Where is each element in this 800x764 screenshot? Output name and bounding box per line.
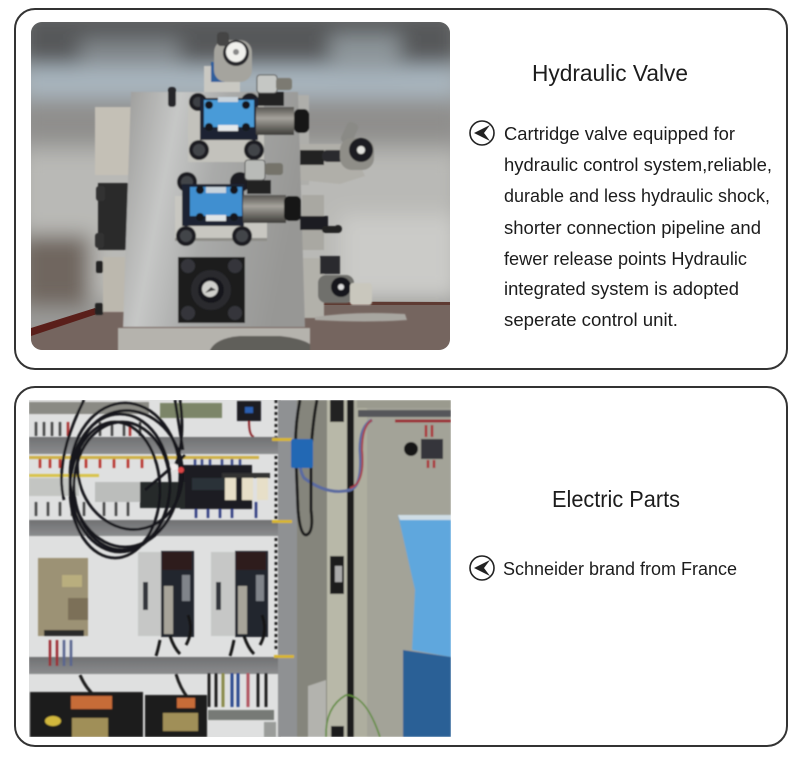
power supply <box>38 558 88 636</box>
square flange <box>178 257 245 323</box>
lower solenoid valve <box>182 184 244 226</box>
heading: electric parts: Electric Parts <box>552 486 680 512</box>
text block: valve description: durable and less hydraulic shock, <box>504 185 770 206</box>
heading: hydraulic valve: Hydraulic Valve <box>532 60 688 86</box>
panel frame: electric parts <box>15 387 787 746</box>
text block: valve description: shorter connection pipeline and <box>504 217 761 238</box>
text block: valve description: fewer release points Hydraulic <box>504 248 747 269</box>
servo drive 1 <box>138 551 194 656</box>
vent <box>308 680 326 737</box>
text block: valve description <box>504 123 772 330</box>
servo drive 2 <box>211 551 268 656</box>
transformers <box>80 674 188 698</box>
right valves <box>300 150 324 165</box>
terminal rows <box>29 402 149 414</box>
cable bundle <box>62 399 196 558</box>
blue sheet <box>398 515 451 657</box>
top relief valve <box>204 66 240 96</box>
rack holes <box>274 400 278 650</box>
photo: hydraulic valve block <box>20 10 460 352</box>
door and frame <box>297 400 327 737</box>
upper solenoid valve <box>200 98 258 140</box>
text block: electric parts description: Schneider brand from France <box>503 558 737 579</box>
base plate <box>118 328 310 352</box>
text block: valve description: Cartridge valve equipped for <box>504 123 735 144</box>
icon: circled arrow <box>470 121 494 145</box>
blue box <box>403 650 451 737</box>
text block: valve description: seperate control unit. <box>504 309 678 330</box>
text block: valve description: integrated system is adopted <box>504 278 739 299</box>
cables and blue terminal block <box>296 400 317 535</box>
photo: electrical cabinet <box>29 399 451 737</box>
text block: valve description: hydraulic control system,reliable, <box>504 154 772 175</box>
upper manifold plate <box>188 100 264 162</box>
panel: hydraulic valve <box>15 9 787 369</box>
panel frame: hydraulic valve <box>15 9 787 369</box>
panel: electric parts <box>15 387 787 746</box>
lower manifold plate <box>175 196 267 239</box>
rear blocks <box>95 107 131 175</box>
table <box>31 300 450 350</box>
lower right terminals <box>209 673 266 707</box>
shelf bars <box>29 437 279 454</box>
icon: circled arrow <box>470 556 494 580</box>
controller module <box>180 465 252 509</box>
main block <box>123 92 305 327</box>
